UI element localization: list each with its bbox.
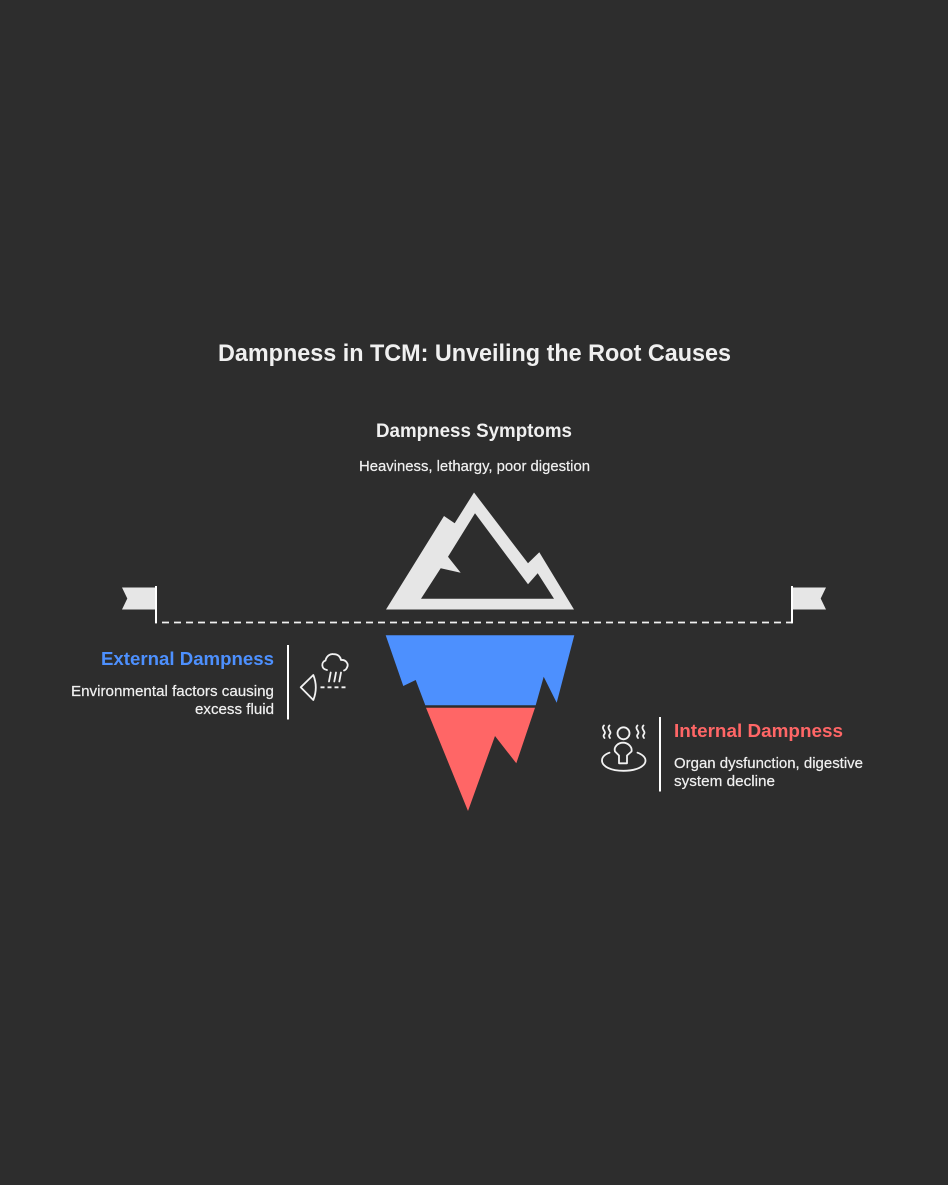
text: symptoms description: Heaviness, lethargy, poor digestion	[359, 459, 590, 475]
panel: internal dampness	[674, 720, 863, 790]
panel: dampness symptoms	[359, 421, 590, 475]
heading: internal dampness: Internal Dampness	[674, 720, 843, 741]
flag: left	[122, 588, 155, 610]
text: internal description: Organ dysfunction, digestive	[674, 756, 863, 772]
heading: dampness symptoms: Dampness Symptoms	[376, 421, 572, 442]
title: Dampness in TCM: Unveiling the Root Causes	[218, 340, 731, 367]
iceberg layer: external dampness	[386, 635, 574, 705]
text: external description: excess fluid	[195, 702, 274, 718]
heading: external dampness: External Dampness	[101, 648, 274, 669]
icon: person with steam	[602, 726, 646, 771]
divider: external	[287, 645, 289, 720]
flag: right	[793, 588, 826, 610]
icon: rain and eye	[301, 654, 348, 700]
divider: internal	[659, 717, 661, 792]
waterline	[156, 586, 792, 623]
iceberg tip	[386, 492, 574, 610]
iceberg layer: internal dampness	[426, 708, 535, 811]
text: external description: Environmental factors causing	[71, 684, 274, 700]
panel: external dampness	[71, 648, 274, 718]
text: internal description: system decline	[674, 774, 775, 790]
